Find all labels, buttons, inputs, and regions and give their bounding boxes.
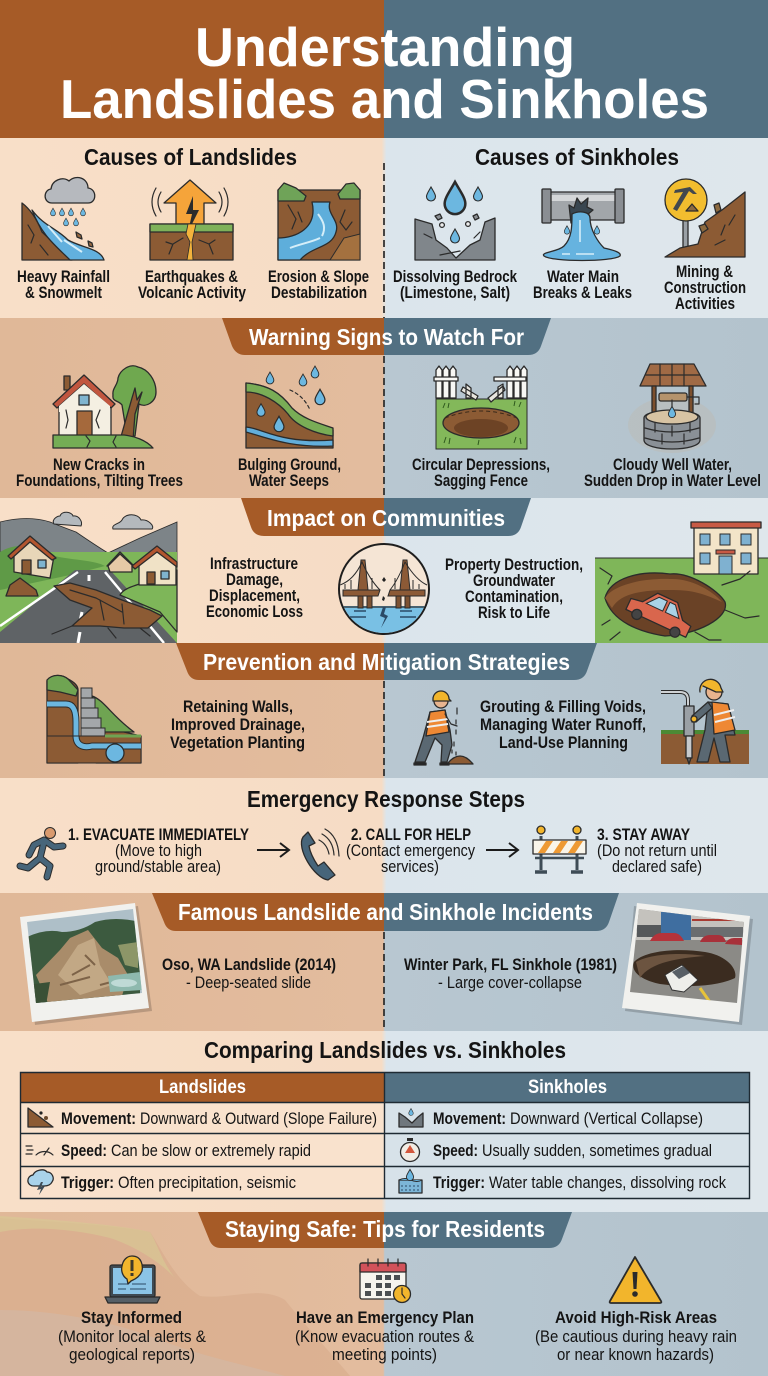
- icon: phone: [301, 829, 339, 880]
- text: step 1: 1. EVACUATE IMMEDIATELY: [68, 826, 249, 844]
- text: emergency plan: Have an Emergency Plan: [296, 1308, 474, 1327]
- label: earthquakes: Earthquakes &: [145, 268, 238, 286]
- banner: staying safe: [198, 1212, 572, 1248]
- icon: slope failure: [28, 1108, 53, 1127]
- text: avoid high-risk areas: Avoid High-Risk Areas: [555, 1308, 717, 1327]
- icon: worker with grouting drill: [661, 679, 749, 764]
- text: emergency plan: [295, 1308, 475, 1364]
- banner: prevention: [176, 643, 597, 680]
- icon: water main break: [542, 189, 624, 260]
- row: landslide speed: Speed:: [61, 1142, 107, 1160]
- text: sinkhole prevention: Grouting & Filling Voids,: [480, 698, 646, 716]
- icon: stopwatch: [400, 1138, 420, 1162]
- column header: landslides: Landslides: [159, 1077, 246, 1098]
- banner: prevention: Prevention and Mitigation Strategies: [203, 649, 570, 675]
- label: erosion: [268, 268, 369, 302]
- label: earthquakes: [138, 268, 247, 302]
- icon: calendar: [360, 1259, 410, 1302]
- text: step 1: (Move to high: [115, 842, 202, 860]
- banner: warning signs: Warning Signs to Watch For: [249, 324, 524, 350]
- panel: staying safe: [0, 1212, 768, 1376]
- text: Oso landslide: Oso, WA Landslide (2014): [162, 956, 336, 974]
- text: right impact: [445, 556, 583, 622]
- row: sinkhole trigger: Trigger:: [433, 1174, 485, 1192]
- label: heavy rainfall: [17, 268, 110, 302]
- text: Winter Park sinkhole: [404, 956, 617, 992]
- banner: staying safe: Staying Safe: Tips for Residents: [225, 1216, 545, 1242]
- text: landslide prevention: Improved Drainage,: [171, 716, 305, 734]
- text: sinkhole prevention: Managing Water Runoff,: [480, 716, 646, 734]
- text: landslide prevention: Retaining Walls,: [183, 698, 293, 716]
- arrow: step 1 to 2: [257, 843, 289, 857]
- text: stay informed: (Monitor local alerts &: [58, 1327, 207, 1346]
- icon: cloudy well: [628, 364, 716, 453]
- photo: Winter Park sinkhole: [622, 903, 753, 1025]
- label: cloudy well water: [584, 456, 761, 490]
- text: left impact: Infrastructure: [210, 555, 298, 573]
- banner: impact on communities: Impact on Communities: [267, 505, 505, 531]
- panel: famous incidents: [0, 893, 768, 1031]
- row: sinkhole movement: [433, 1110, 703, 1128]
- text: emergency plan: (Know evacuation routes &: [295, 1327, 475, 1346]
- label: heavy rainfall: & Snowmelt: [25, 284, 102, 302]
- text: sinkhole prevention: Land-Use Planning: [499, 734, 628, 752]
- row: landslide movement: Movement:: [61, 1110, 136, 1128]
- text: avoid high-risk areas: (Be cautious during heavy rain: [535, 1327, 737, 1346]
- panel: prevention and mitigation: [0, 643, 768, 778]
- text: right impact: Risk to Life: [478, 604, 550, 622]
- icon: vertical collapse: [399, 1108, 423, 1127]
- title: Understanding: [195, 16, 575, 78]
- panel: header: [0, 0, 768, 138]
- icon: worker filling void: [414, 691, 473, 765]
- title: [60, 16, 709, 130]
- text: step 2: services): [381, 858, 439, 876]
- text: step 2: (Contact emergency: [346, 842, 476, 860]
- text: right impact: Groundwater: [473, 572, 555, 590]
- icon: retaining wall and drainage: [47, 675, 141, 763]
- text: step 3: [597, 826, 717, 876]
- title: Landslides and Sinkholes: [60, 68, 709, 130]
- text: step 2: 2. CALL FOR HELP: [351, 826, 471, 844]
- text: left impact: Economic Loss: [206, 603, 303, 621]
- label: dissolving bedrock: (Limestone, Salt): [400, 284, 510, 302]
- row: sinkhole movement: Movement:: [433, 1110, 506, 1128]
- label: bulging ground: Bulging Ground,: [238, 456, 341, 474]
- label: dissolving bedrock: Dissolving Bedrock: [393, 268, 518, 286]
- text: step 3: declared safe): [612, 858, 702, 876]
- label: circular depressions: Circular Depressions,: [412, 456, 550, 474]
- panel: warning signs: [0, 318, 768, 498]
- label: erosion: Erosion & Slope: [268, 268, 369, 286]
- icon: cracked house and tilting tree: [53, 366, 156, 448]
- icon: road barrier: [533, 826, 586, 872]
- text: step 3: (Do not return until: [597, 842, 717, 860]
- icon: warning triangle: [610, 1257, 661, 1303]
- text: step 3: 3. STAY AWAY: [597, 826, 690, 844]
- text: avoid high-risk areas: or near known hazards): [557, 1345, 714, 1364]
- icon: bulging ground: [246, 366, 333, 448]
- text: Oso landslide: [162, 956, 336, 992]
- row: landslide speed: Can be slow or extremely rapid: [111, 1142, 311, 1160]
- text: Winter Park sinkhole: - Large cover-collapse: [438, 974, 582, 992]
- icon: heavy rainfall: [22, 177, 104, 260]
- panel: emergency response steps: [0, 778, 768, 893]
- text: Winter Park sinkhole: Winter Park, FL Sinkhole (1981): [404, 956, 617, 974]
- label: circular depressions: [412, 456, 550, 490]
- row: sinkhole trigger: Water table changes, dissolving rock: [489, 1174, 727, 1192]
- text: landslide prevention: [170, 698, 305, 752]
- text: step 1: [68, 826, 249, 876]
- panel: impact on communities: [0, 498, 768, 643]
- heading: comparing: Comparing Landslides vs. Sinkholes: [204, 1037, 566, 1063]
- icon: circular depression and sagging fence: [434, 366, 527, 449]
- row: landslide trigger: Trigger:: [61, 1174, 114, 1192]
- label: cloudy well water: Cloudy Well Water,: [613, 456, 732, 474]
- label: dissolving bedrock: [393, 268, 518, 302]
- heading: causes of landslides: Causes of Landslides: [84, 144, 297, 170]
- row: sinkhole speed: Speed:: [433, 1142, 478, 1160]
- text: right impact: Contamination,: [465, 588, 563, 606]
- photo: Oso landslide: [20, 903, 152, 1025]
- panel: comparison: [0, 1031, 768, 1212]
- row: sinkhole speed: Usually sudden, sometimes gradual: [482, 1142, 712, 1160]
- illustration: landslide across road: [0, 512, 177, 643]
- table: landslides vs sinkholes: [20, 1072, 750, 1198]
- text: stay informed: Stay Informed: [81, 1308, 182, 1327]
- icon: running person: [20, 828, 63, 877]
- label: water main: Breaks & Leaks: [533, 284, 632, 302]
- text: landslide prevention: Vegetation Planting: [170, 734, 305, 752]
- label: water main: [533, 268, 632, 302]
- banner: famous incidents: Famous Landslide and Sinkhole Incidents: [178, 899, 593, 925]
- text: avoid high-risk areas: [535, 1308, 737, 1364]
- icon: laptop alert: [105, 1256, 160, 1303]
- illustration: sinkhole swallowing car: [595, 522, 768, 643]
- row: sinkhole movement: Downward (Vertical Collapse): [510, 1110, 703, 1128]
- label: new cracks: Foundations, Tilting Trees: [16, 472, 183, 490]
- label: bulging ground: [238, 456, 341, 490]
- column header: sinkholes: Sinkholes: [528, 1077, 607, 1098]
- row: landslide trigger: Often precipitation, seismic: [118, 1174, 296, 1192]
- row: landslide movement: [61, 1110, 377, 1128]
- label: circular depressions: Sagging Fence: [434, 472, 528, 490]
- text: left impact: Damage,: [226, 571, 283, 589]
- icon: storm cloud: [28, 1170, 53, 1195]
- text: step 2: [346, 826, 476, 876]
- icon: earthquake house: [150, 180, 233, 260]
- background: layered terrain: [0, 1216, 350, 1376]
- label: mining: [664, 263, 746, 313]
- text: stay informed: [58, 1308, 207, 1364]
- text: stay informed: geological reports): [69, 1345, 195, 1364]
- label: erosion: Destabilization: [271, 284, 367, 302]
- row: landslide trigger: [61, 1174, 296, 1192]
- text: right impact: Property Destruction,: [445, 556, 583, 574]
- heading: causes of sinkholes: Causes of Sinkholes: [475, 144, 679, 170]
- arrow: step 2 to 3: [486, 843, 518, 857]
- icon: water table: [399, 1169, 422, 1193]
- label: mining: Construction: [664, 279, 746, 297]
- icon: mining: [665, 179, 745, 257]
- label: mining: Activities: [675, 295, 735, 313]
- banner: impact on communities: [241, 498, 531, 536]
- label: new cracks: [16, 456, 183, 490]
- label: earthquakes: Volcanic Activity: [138, 284, 247, 302]
- label: water main: Water Main: [547, 268, 619, 286]
- text: emergency plan: meeting points): [332, 1345, 437, 1364]
- label: heavy rainfall: Heavy Rainfall: [17, 268, 110, 286]
- text: Oso landslide: - Deep-seated slide: [186, 974, 311, 992]
- panel: causes: [0, 138, 768, 318]
- row: landslide movement: Downward & Outward (Slope Failure): [140, 1110, 377, 1128]
- label: mining: Mining &: [676, 263, 733, 281]
- heading: emergency response: Emergency Response Steps: [247, 786, 525, 812]
- icon: dissolving bedrock: [415, 182, 495, 260]
- text: step 1: ground/stable area): [95, 858, 221, 876]
- icon: broken bridge: [339, 544, 429, 636]
- banner: famous incidents: [152, 893, 619, 931]
- text: sinkhole prevention: [480, 698, 646, 752]
- label: new cracks: New Cracks in: [53, 456, 145, 474]
- banner: warning signs: [222, 318, 551, 355]
- text: left impact: Displacement,: [209, 587, 300, 605]
- icon: erosion and slope: [278, 183, 360, 260]
- text: left impact: [206, 555, 303, 621]
- label: bulging ground: Water Seeps: [249, 472, 329, 490]
- icon: speed gauge: [26, 1146, 53, 1155]
